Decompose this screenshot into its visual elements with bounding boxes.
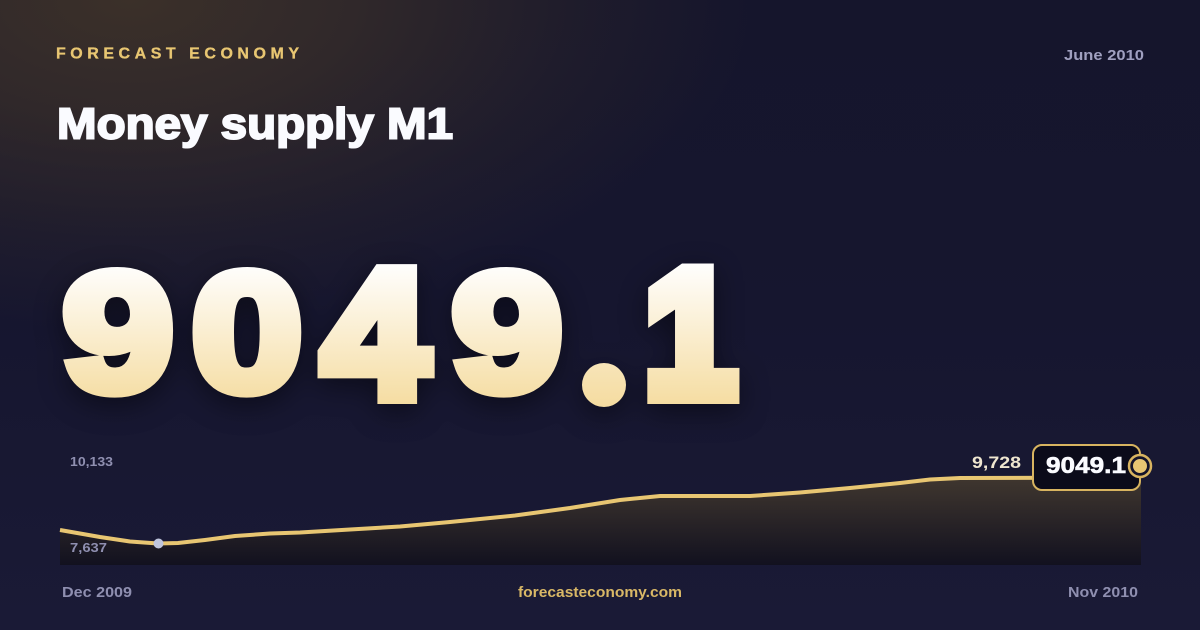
low point marker xyxy=(154,538,164,548)
current value marker xyxy=(1129,455,1151,477)
peak value label: 9,728 xyxy=(972,453,1021,472)
axis max label: 10,133 xyxy=(70,454,113,469)
axis min label: 7,637 xyxy=(70,540,107,555)
chart line xyxy=(60,478,1141,544)
title: Money supply M1 xyxy=(57,100,453,148)
brand label: FORECAST ECONOMY xyxy=(56,46,299,62)
date: June 2010 xyxy=(1064,47,1144,64)
start date: Dec 2009 xyxy=(62,584,132,601)
line chart xyxy=(60,478,1141,565)
headline value: 1 xyxy=(645,234,735,433)
pill value: 9049.1 xyxy=(1046,452,1126,478)
source url: forecasteconomy.com xyxy=(518,584,682,601)
headline value: 9 xyxy=(62,239,173,426)
headline value: 4 xyxy=(322,231,428,436)
headline value: 9 xyxy=(451,239,562,426)
current value pill xyxy=(1033,445,1140,490)
chart area fill xyxy=(60,478,1141,565)
headline value: 0 xyxy=(192,239,302,426)
end date: Nov 2010 xyxy=(1068,584,1138,601)
